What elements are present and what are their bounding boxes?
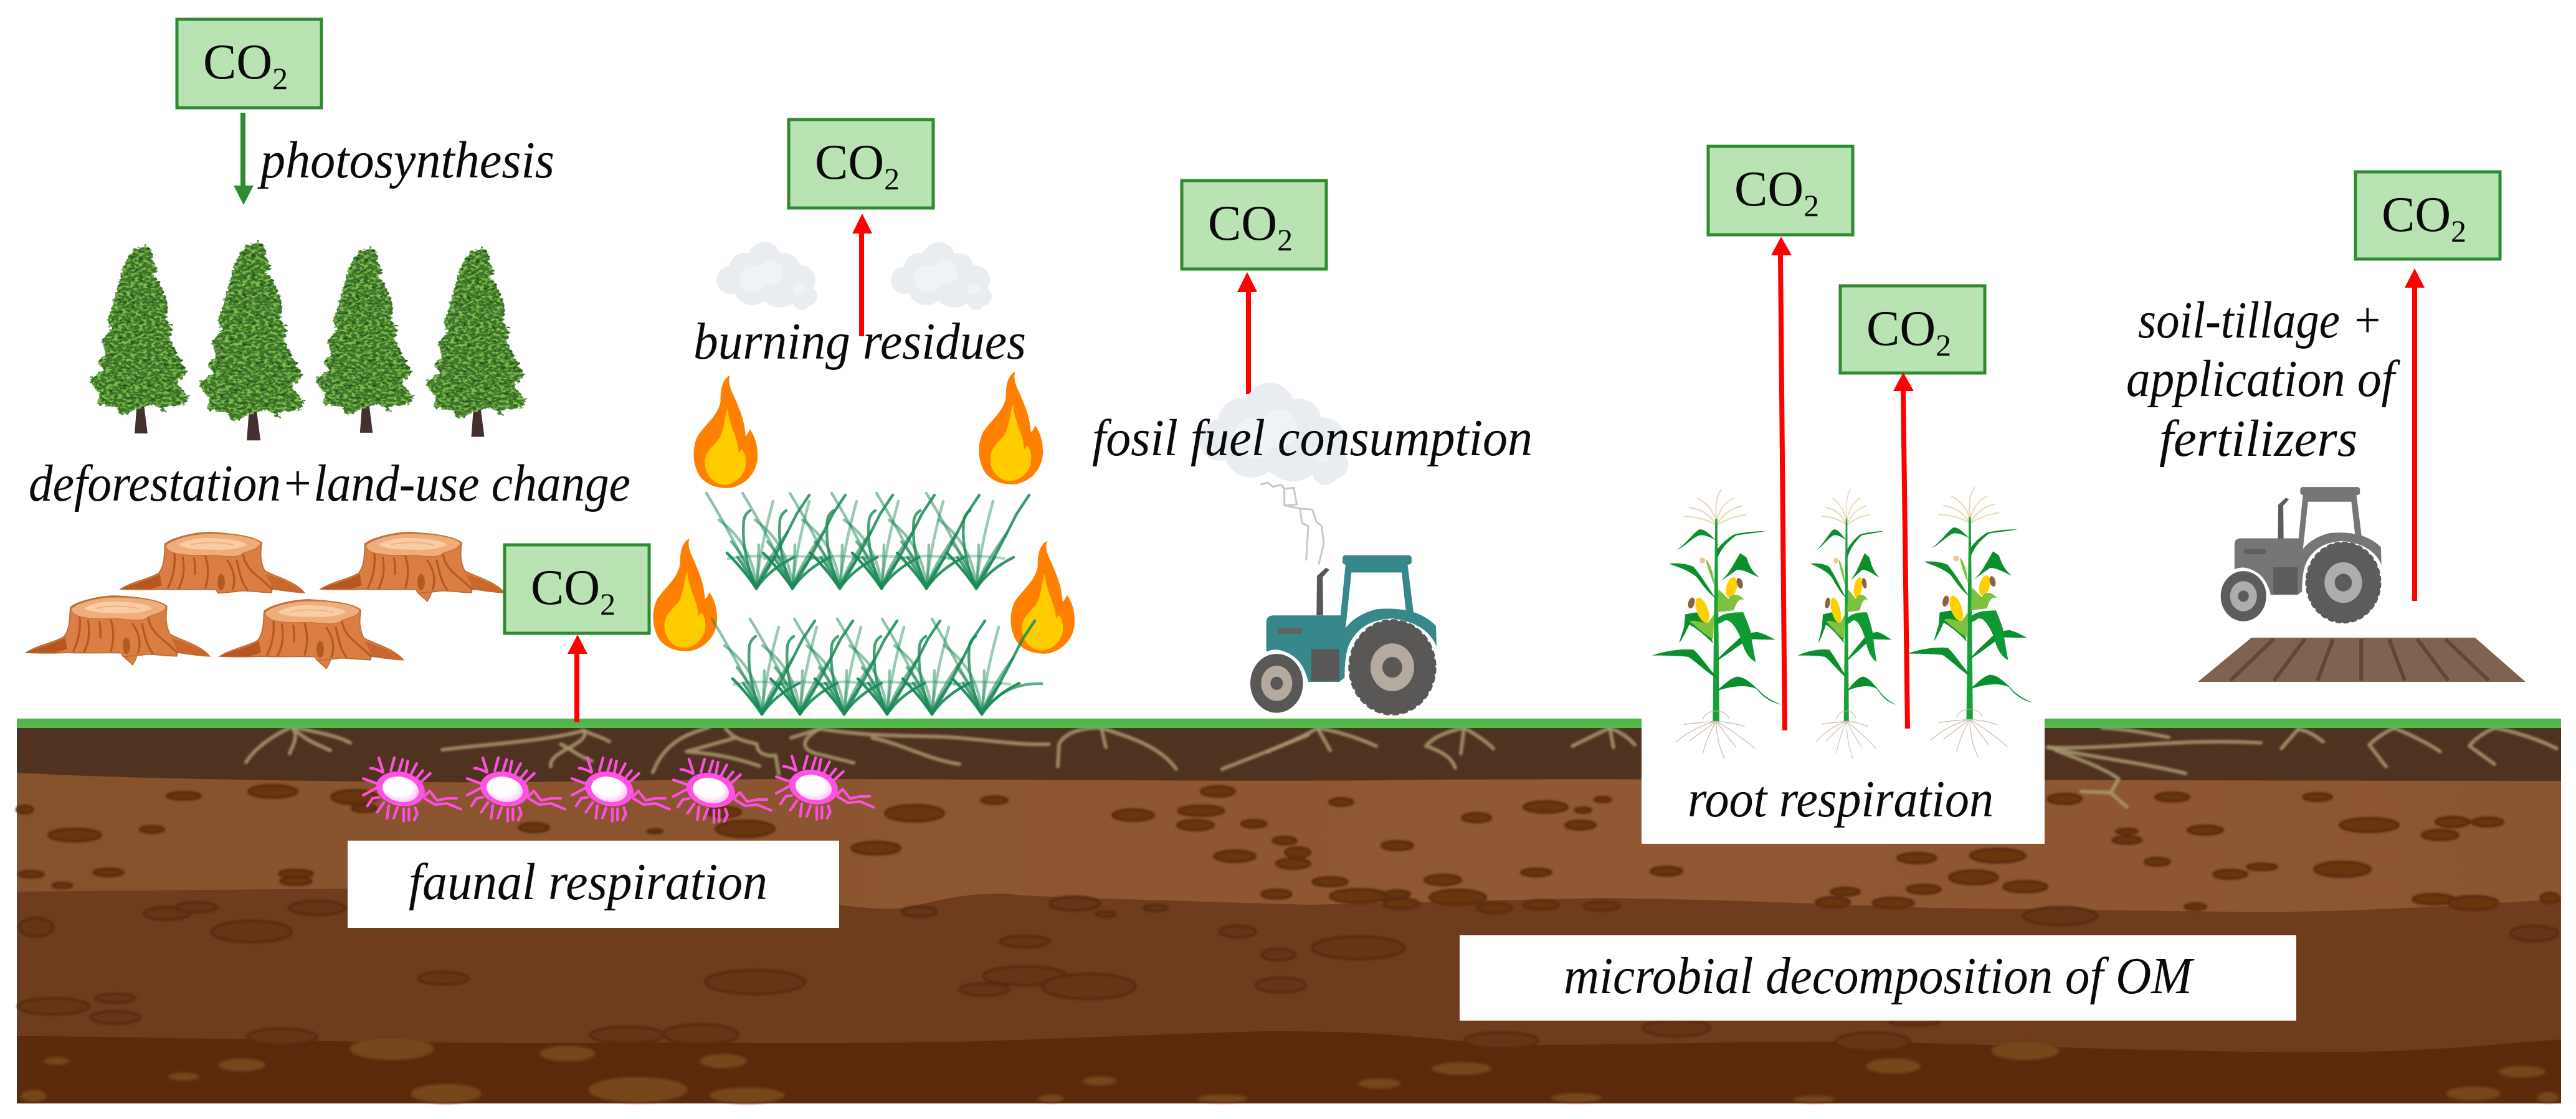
- tree 3: [316, 247, 414, 433]
- CO2 box: soil tillage: [2355, 172, 2500, 259]
- arrow: red, burning residues to CO2: [852, 214, 872, 336]
- corn plant middle: [1797, 489, 1896, 758]
- arrow: red, fossil fuel to CO2: [1237, 272, 1257, 394]
- icon: corn plants: [1652, 488, 2033, 758]
- icon: soil fauna microbes: [363, 756, 874, 823]
- CO2 box: faunal respiration: 2: [600, 587, 615, 621]
- icon: teal tractor: [1250, 555, 1437, 715]
- soil spots: subsoil: [17, 785, 2559, 913]
- stump bottom right: [220, 600, 403, 669]
- icon: grey tractor: [2220, 487, 2382, 623]
- CO2 box: photosynthesis uptake: 2: [272, 61, 288, 96]
- flame upper left: [693, 375, 758, 488]
- grass row upper: [706, 493, 1029, 588]
- arrow: red, corn roots to upper CO2: [1771, 237, 1792, 730]
- flame lower left: [653, 539, 717, 651]
- label: soil-tillage + application of fertilizers: [2126, 291, 2401, 468]
- microbe 2: [467, 758, 565, 821]
- flame lower right: [1010, 541, 1075, 654]
- CO2 box: faunal respiration: [505, 545, 649, 633]
- flame upper right: [979, 372, 1043, 484]
- cloud left: [716, 242, 817, 310]
- tree 1: [90, 245, 189, 433]
- tree 2: [199, 242, 304, 440]
- arrow: red, corn roots to lower CO2: [1893, 372, 1914, 729]
- CO2 box: faunal respiration: CO: [531, 560, 600, 615]
- CO2 box: root respiration, tall arrow: [1708, 146, 1853, 235]
- label: soil-tillage + application of fertilizers: fertilizers: [2159, 410, 2357, 468]
- CO2 box: root respiration, short arrow: CO: [1866, 301, 1936, 356]
- soil spots: bedrock stones: [21, 1037, 2559, 1103]
- CO2 box: burning residues: CO: [815, 135, 884, 190]
- microbe 1: [363, 758, 461, 821]
- soil layer: bedrock: [17, 1031, 2561, 1103]
- CO2 box: photosynthesis uptake: CO: [203, 35, 272, 90]
- CO2 box: burning residues: [789, 120, 933, 208]
- microbe 5: [776, 756, 874, 819]
- arrow: green, down to trees: [234, 113, 254, 205]
- label: fosil fuel consumption: fosil fuel consumption: [1092, 409, 1533, 467]
- CO2 box: root respiration, short arrow: 2: [1936, 328, 1951, 362]
- icon: row of four conifer trees: [90, 242, 526, 440]
- label: soil-tillage + application of fertilizers: application of: [2126, 350, 2401, 408]
- label box: microbial decomposition of OM: microbial decomposition of OM: [1564, 947, 2195, 1005]
- CO2 box: root respiration, tall arrow: CO: [1734, 162, 1804, 217]
- tree 4: [426, 248, 526, 437]
- label: burning residues: burning residues: [693, 313, 1026, 371]
- icon: exhaust cloud: [1199, 383, 1348, 485]
- soil layer: deeper subsoil: [17, 889, 2561, 1103]
- roots in the topsoil: [246, 727, 2557, 807]
- label box: faunal respiration: faunal respiration: [409, 853, 768, 911]
- CO2 box: soil tillage: CO: [2382, 187, 2451, 242]
- CO2 box: fossil fuel: [1182, 181, 1326, 269]
- CO2 box: soil tillage: 2: [2451, 214, 2466, 248]
- soil layer: brown subsoil: [17, 773, 2561, 1103]
- icon: flames: [653, 372, 1075, 654]
- soil spots: deep subsoil: [18, 897, 2558, 1051]
- grass row lower: [712, 619, 1043, 714]
- arrow: red, field to CO2: [2405, 268, 2425, 601]
- white label panel behind root respiration: [1642, 716, 2045, 844]
- icon: ploughed field: [2198, 638, 2526, 682]
- corn plant right: [1908, 488, 2033, 757]
- label: deforestation and land-use change: deforestation+land-use change: [29, 455, 630, 512]
- icon: grass residues: [706, 493, 1043, 714]
- label box: microbial decomposition of OM: [1460, 935, 2296, 1021]
- CO2 box: burning residues: 2: [884, 161, 900, 196]
- stump bottom left: [26, 596, 209, 665]
- CO2 box: fossil fuel: CO: [1208, 196, 1277, 251]
- CO2 box: photosynthesis uptake: [177, 19, 321, 108]
- label: soil-tillage + application of fertilizers: soil-tillage +: [2138, 291, 2383, 349]
- ground surface grass strip: [17, 719, 2561, 728]
- label: photosynthesis: photosynthesis: [257, 131, 554, 189]
- CO2 box: root respiration, tall arrow: 2: [1804, 188, 1819, 223]
- microbe 3: [572, 758, 670, 821]
- icon: tree stumps: [26, 532, 504, 669]
- CO2 box: root respiration, short arrow: [1840, 286, 1985, 373]
- icon: exhaust smoke lines: [1260, 483, 1324, 565]
- corn plant left: [1652, 489, 1782, 758]
- label: root respiration: root respiration: [1688, 770, 1994, 828]
- microbe 4: [673, 759, 771, 823]
- panel: soil profile: [17, 725, 2561, 1103]
- soil layer: dark topsoil: [17, 725, 2561, 1103]
- icon: smoke clouds above burning residues: [716, 242, 992, 310]
- cloud right: [891, 242, 992, 310]
- label box: faunal respiration: [348, 841, 839, 928]
- stump top left: [121, 532, 304, 593]
- CO2 box: fossil fuel: 2: [1277, 222, 1293, 257]
- arrow: red, soil to CO2: [568, 635, 587, 722]
- stump top right: [321, 532, 504, 602]
